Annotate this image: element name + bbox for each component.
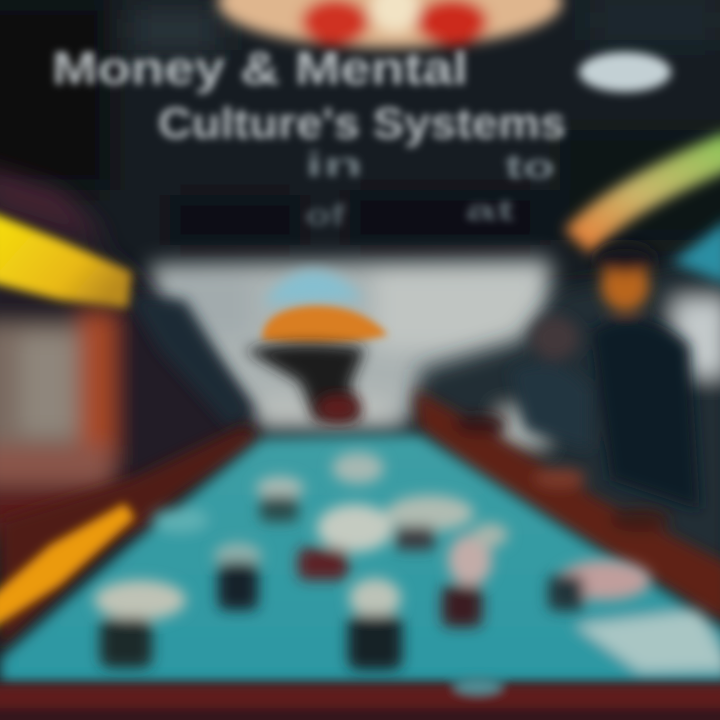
piece 1	[94, 580, 186, 668]
teal floor	[0, 434, 720, 684]
back wall	[150, 258, 560, 430]
rainbow arc	[578, 148, 720, 285]
central figure	[245, 270, 388, 422]
dark arm on the left	[128, 295, 252, 430]
piece 7	[348, 578, 402, 670]
light blue dome	[262, 270, 365, 304]
left building	[0, 160, 250, 570]
red floor edges	[0, 390, 720, 650]
piece 6	[386, 495, 474, 550]
heading	[52, 42, 566, 232]
background: dark ceiling	[0, 0, 720, 290]
heading: in	[305, 146, 363, 184]
ceiling light	[579, 52, 671, 92]
piece 10	[548, 560, 651, 611]
piece 2	[214, 542, 262, 610]
floor objects	[94, 452, 651, 670]
orange band	[262, 306, 388, 344]
dark body	[245, 343, 365, 420]
piece 5	[298, 504, 393, 580]
heading: of	[305, 199, 346, 232]
top ornament: red and cream shape	[218, 0, 562, 48]
right dark side	[415, 260, 720, 590]
heading: Money & Mental	[52, 42, 468, 94]
piece 8	[442, 534, 492, 627]
yellow awning	[0, 212, 132, 308]
bottom band	[0, 678, 720, 720]
heading: to	[505, 148, 555, 186]
red foot	[316, 394, 360, 422]
piece 9	[472, 523, 508, 547]
heading: Culture's Systems	[158, 99, 566, 148]
orange streak	[0, 503, 135, 630]
person at right	[510, 244, 700, 510]
piece 4	[332, 452, 384, 484]
piece 3	[256, 476, 304, 522]
heading: at	[465, 194, 515, 227]
